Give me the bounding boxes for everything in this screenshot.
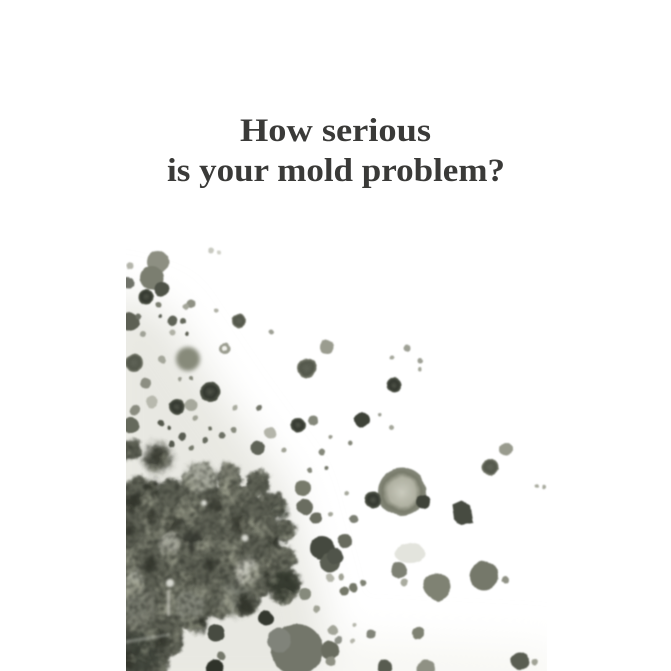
dense mold colony xyxy=(113,439,301,671)
title xyxy=(167,113,505,189)
infographic canvas xyxy=(126,118,547,671)
colony base tones xyxy=(113,445,250,671)
blurred pale spore xyxy=(176,347,200,371)
background paper wash xyxy=(100,290,560,671)
title: How serious xyxy=(240,113,431,149)
colony dark blotches xyxy=(120,479,298,668)
scattered spores left and centre xyxy=(121,248,435,671)
mold photograph xyxy=(126,247,547,671)
colony solid base with lobed edge xyxy=(119,439,301,671)
colony pale gaps xyxy=(125,500,248,644)
title: is your mold problem? xyxy=(167,153,505,189)
spores on right side xyxy=(391,442,546,670)
colony pale patches xyxy=(122,462,261,621)
large spore with pale centre xyxy=(364,468,430,516)
